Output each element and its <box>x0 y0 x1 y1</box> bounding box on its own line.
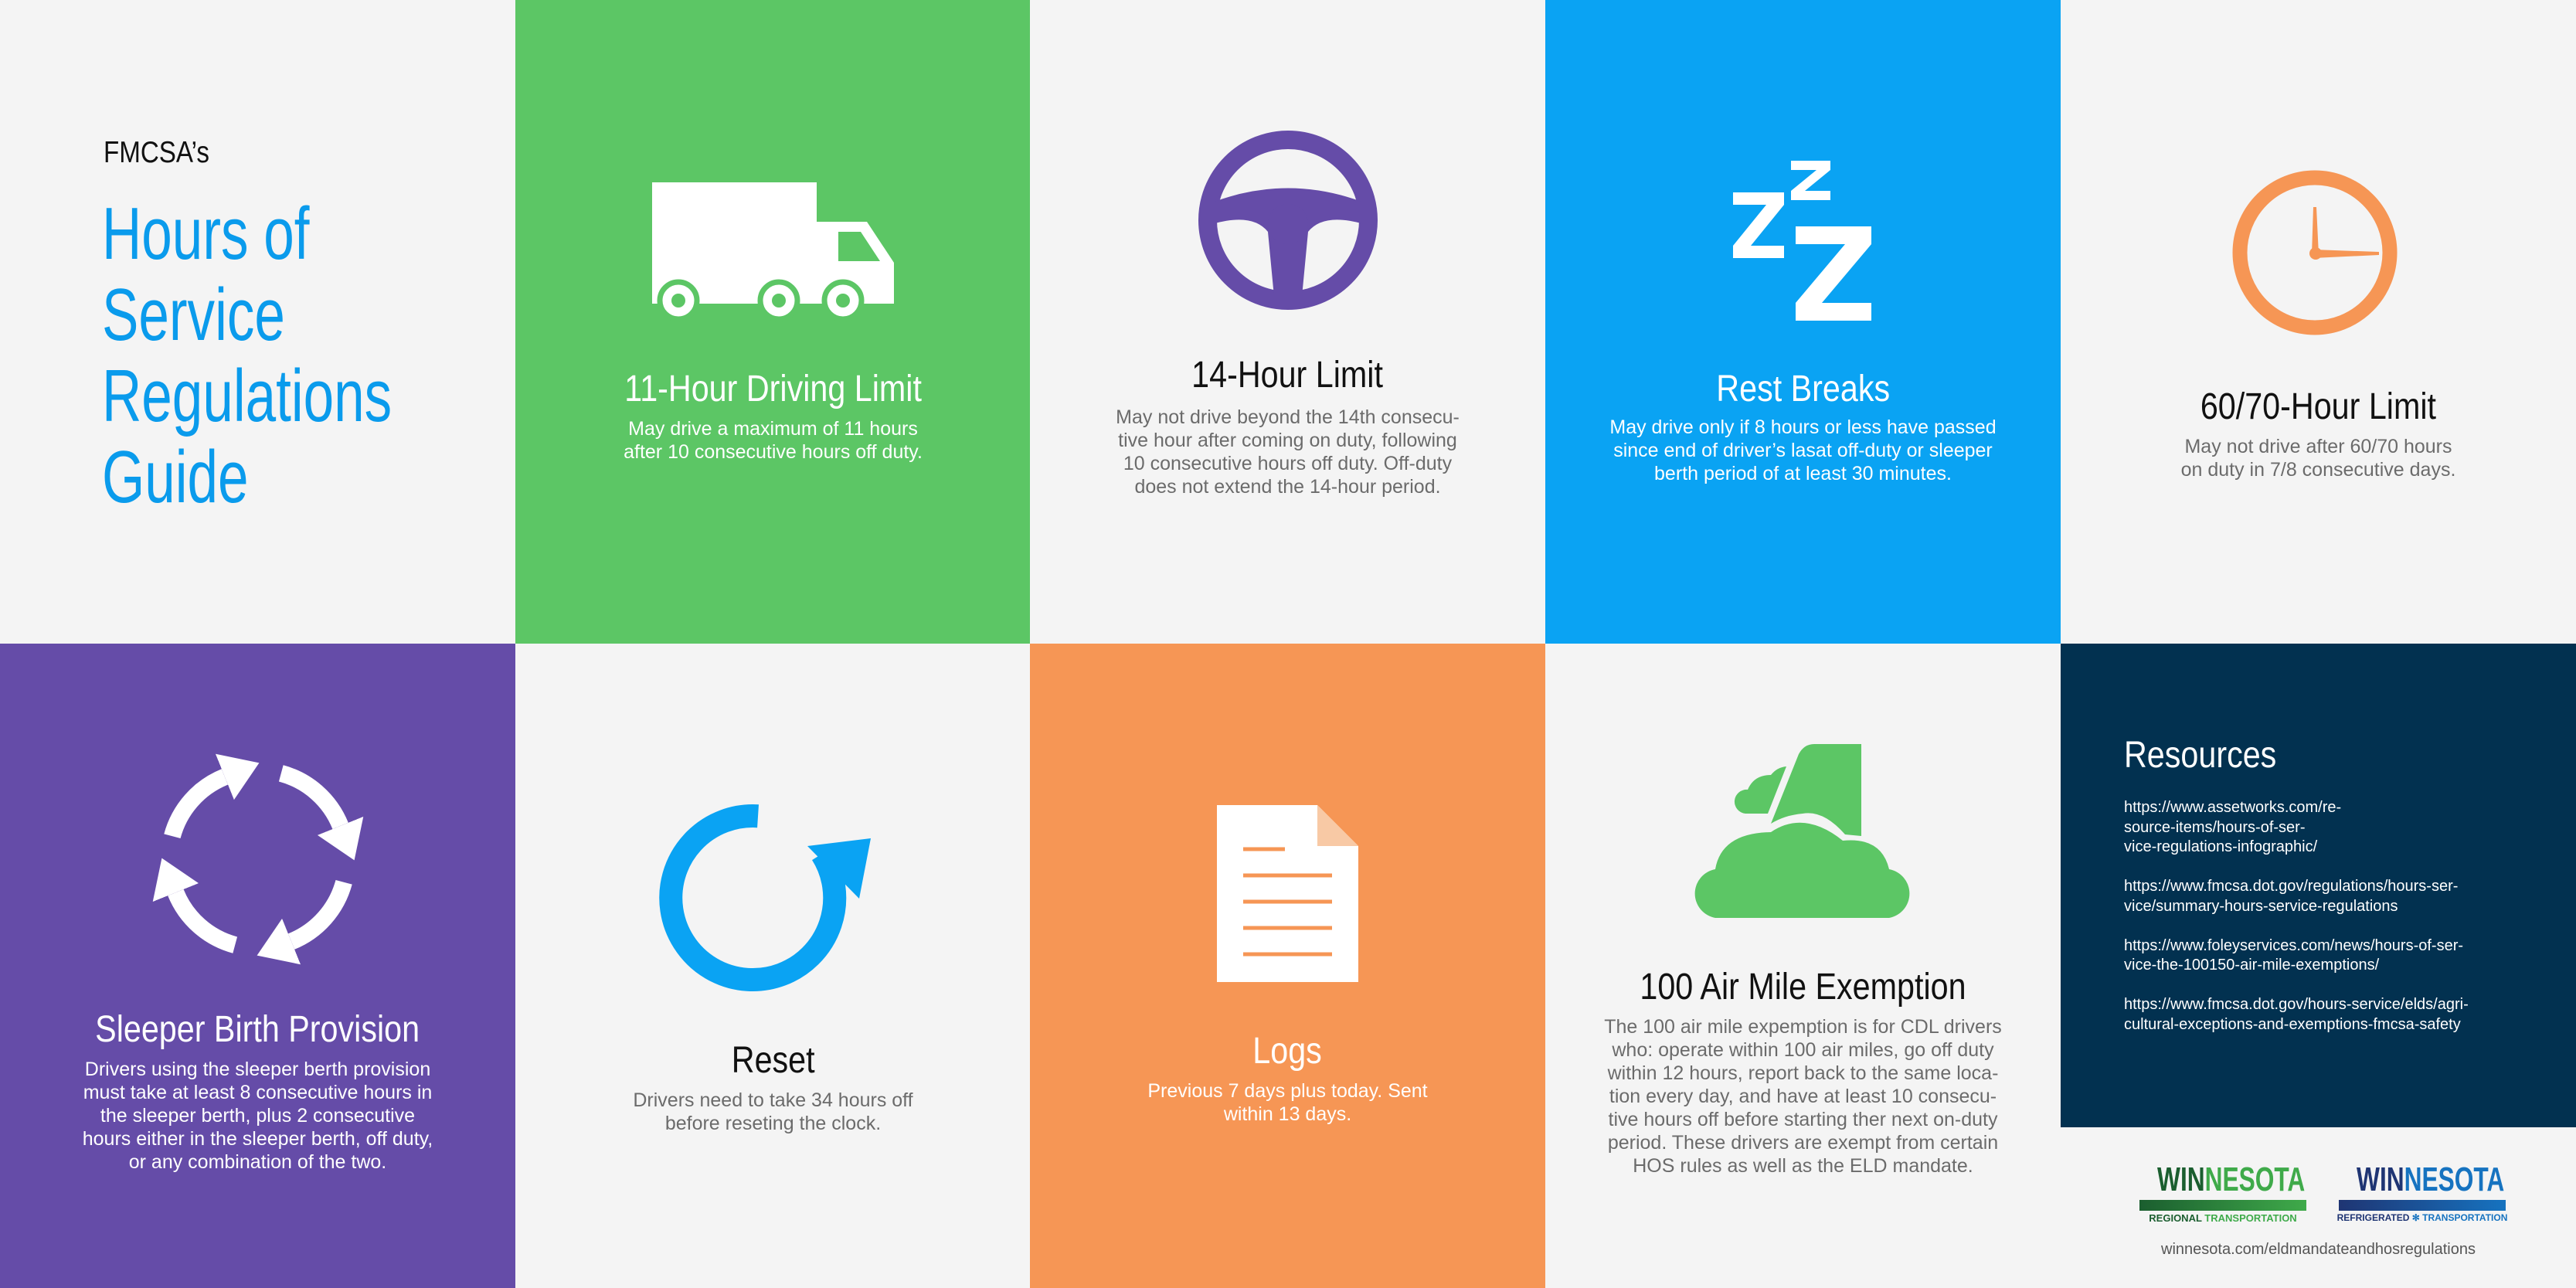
body text: does not extend the 14-hour period. <box>1134 476 1441 498</box>
heading: Logs <box>1253 1031 1322 1072</box>
icon: reset arrow <box>659 804 871 991</box>
panel: 100 air mile exemption <box>1545 644 2061 1288</box>
body text <box>1604 1016 2002 1177</box>
title: Hours of <box>102 192 309 275</box>
panel: resources <box>2061 644 2576 1127</box>
icon: truck <box>652 182 894 317</box>
body text: HOS rules as well as the ELD mandate. <box>1633 1155 1973 1177</box>
body text: berth period of at least 30 minutes. <box>1654 463 1952 484</box>
panel: rest breaks <box>1545 0 2061 644</box>
body text: hours either in the sleeper berth, off duty, <box>83 1128 433 1150</box>
body text: May drive a maximum of 11 hours <box>628 418 918 440</box>
body text: May not drive beyond the 14th consecu- <box>1116 406 1460 428</box>
body text: the sleeper berth, plus 2 consecutive <box>100 1105 415 1127</box>
panel: reset <box>515 644 1031 1288</box>
links list: cultural-exceptions-and-exemptions-fmcsa-safety <box>2124 1015 2461 1032</box>
links list <box>2124 799 2469 1032</box>
heading: 11-Hour Driving Limit <box>624 369 922 410</box>
logo: regional: WINNESOTA <box>2157 1161 2305 1198</box>
body text <box>633 1089 913 1134</box>
panel: logos <box>2061 1127 2576 1288</box>
icon: clouds <box>1695 744 1910 918</box>
links list: https://www.assetworks.com/re- <box>2124 799 2341 816</box>
body text: before reseting the clock. <box>665 1113 881 1134</box>
body text: May drive only if 8 hours or less have passed <box>1609 416 1997 438</box>
icon: cycle arrows <box>153 754 363 964</box>
heading: 14-Hour Limit <box>1192 355 1383 396</box>
body text: must take at least 8 consecutive hours in <box>83 1082 432 1103</box>
heading: Resources <box>2124 735 2276 776</box>
body text: The 100 air mile expemption is for CDL drivers <box>1604 1016 2002 1038</box>
body text: period. These drivers are exempt from certain <box>1608 1132 1998 1154</box>
title: Guide <box>102 436 249 518</box>
body text <box>83 1059 433 1173</box>
website url: winnesota.com/eldmandateandhosregulations <box>2161 1241 2476 1258</box>
icon: steering wheel <box>1198 131 1378 310</box>
body text: tion every day, and have at least 10 consecu- <box>1609 1086 1997 1107</box>
heading: Sleeper Birth Provision <box>96 1009 420 1050</box>
links list: https://www.fmcsa.dot.gov/hours-service/elds/agri- <box>2124 996 2469 1013</box>
links list: https://www.foleyservices.com/news/hours-of-ser- <box>2124 936 2463 953</box>
logo: regional: REGIONAL TRANSPORTATION <box>2149 1212 2297 1224</box>
body text: on duty in 7/8 consecutive days. <box>2181 459 2455 481</box>
panel: 11-hour driving limit <box>515 0 1031 644</box>
body text: 10 consecutive hours off duty. Off-duty <box>1123 453 1452 474</box>
links list: vice-the-100150-air-mile-exemptions/ <box>2124 957 2379 974</box>
icon: document <box>1217 805 1358 982</box>
panel: logs <box>1030 644 1545 1288</box>
heading: Reset <box>732 1040 814 1081</box>
body text: Previous 7 days plus today. Sent <box>1147 1080 1428 1102</box>
body text <box>1147 1080 1428 1125</box>
body text: within 12 hours, report back to the same loca- <box>1608 1062 1998 1084</box>
body text: tive hour after coming on duty, following <box>1118 430 1457 451</box>
icon: zzz <box>1733 161 1871 321</box>
logo: refrigerated: REFRIGERATED ✻ TRANSPORTATION <box>2337 1212 2507 1223</box>
links list: vice-regulations-infographic/ <box>2124 838 2317 855</box>
body text: after 10 consecutive hours off duty. <box>624 441 923 463</box>
body text <box>2181 436 2455 481</box>
subtitle: FMCSA's: FMCSA’s <box>104 136 209 169</box>
links list: vice/summary-hours-service-regulations <box>2124 898 2398 915</box>
body text: Drivers using the sleeper berth provision <box>85 1059 430 1080</box>
title: Service <box>102 274 285 356</box>
panel: sleeper berth provision <box>0 644 515 1288</box>
icon: clock <box>2233 170 2397 335</box>
links list: source-items/hours-of-ser- <box>2124 819 2306 836</box>
logo: regional <box>2139 1161 2306 1224</box>
body text <box>624 418 923 463</box>
title: Regulations <box>102 355 392 437</box>
body text: or any combination of the two. <box>129 1151 386 1173</box>
body text <box>1609 416 1997 484</box>
panel: 60/70-hour limit <box>2061 0 2576 644</box>
panel: 14-hour limit <box>1030 0 1545 644</box>
body text <box>1116 406 1460 498</box>
body text: within 13 days. <box>1224 1103 1351 1125</box>
panel: title <box>0 0 515 644</box>
title <box>102 192 392 518</box>
body text: since end of driver’s lasat off-duty or sleeper <box>1613 440 1993 461</box>
body text: Drivers need to take 34 hours off <box>633 1089 913 1111</box>
logo: refrigerated: WINNESOTA <box>2357 1161 2504 1198</box>
logo: refrigerated <box>2337 1161 2507 1223</box>
heading: 100 Air Mile Exemption <box>1640 967 1966 1008</box>
heading: 60/70-Hour Limit <box>2200 386 2436 427</box>
links list: https://www.fmcsa.dot.gov/regulations/hours-ser- <box>2124 878 2458 895</box>
body text: who: operate within 100 air miles, go off duty <box>1612 1039 1994 1061</box>
body text: tive hours off before starting ther next on-duty <box>1609 1109 1998 1130</box>
body text: May not drive after 60/70 hours <box>2184 436 2452 457</box>
heading: Rest Breaks <box>1716 369 1890 410</box>
